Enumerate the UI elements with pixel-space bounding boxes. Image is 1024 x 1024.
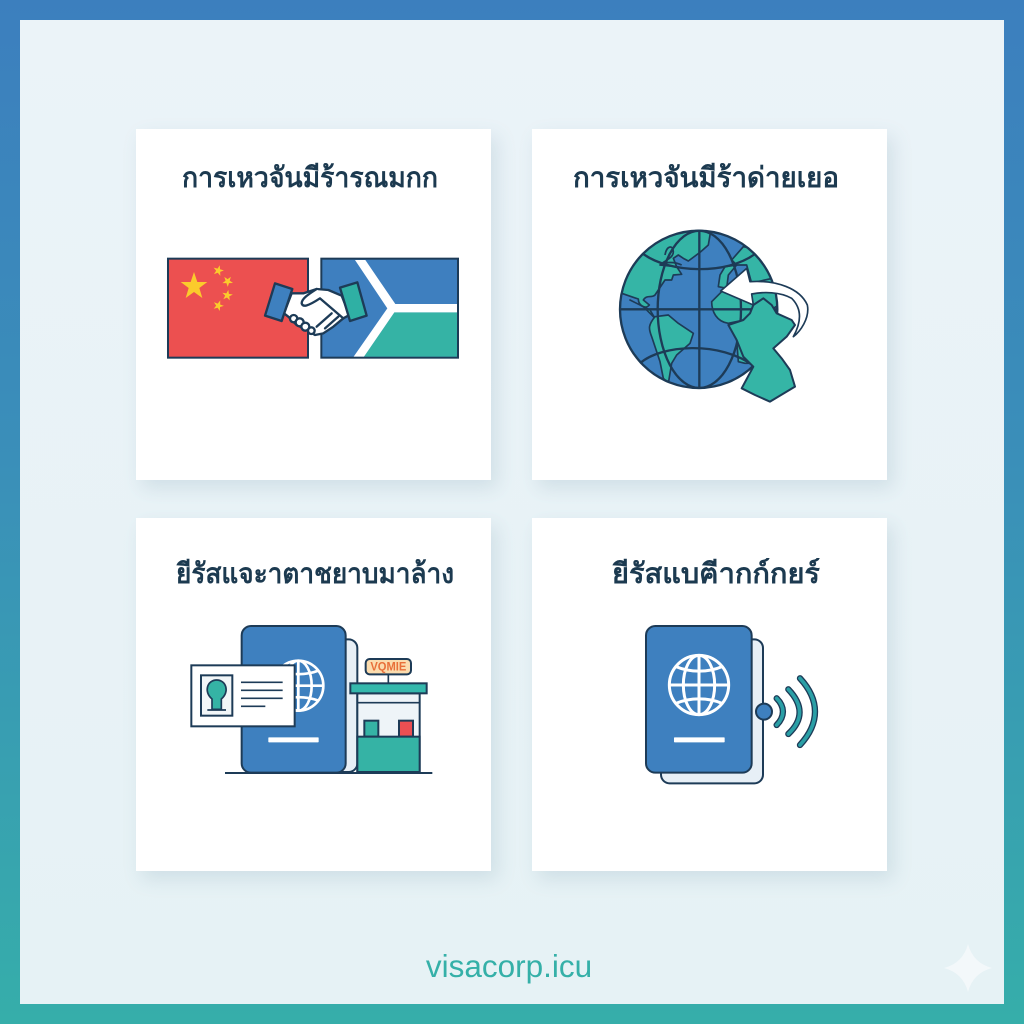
panel: bottom right, e-passport <box>532 518 887 871</box>
heading: panel 1: การเหวจันมีร้ารณมกก <box>182 162 438 193</box>
icon: globe with arrow and map <box>610 225 808 402</box>
heading: panel 4: ยีรัสแบฅีากก์กยร์ <box>611 558 820 589</box>
heading: panel 3: ยีรัสแจะาตาชยาบมาล้าง <box>175 558 454 589</box>
red flag <box>168 259 308 358</box>
icon: e-passport with signal <box>646 626 815 783</box>
ground line <box>225 770 432 776</box>
signal waves <box>777 678 815 745</box>
curved arrow <box>721 268 808 337</box>
back page <box>661 639 763 783</box>
kiosk <box>350 659 427 772</box>
passport back page <box>330 639 357 772</box>
passport <box>646 626 752 773</box>
passport <box>242 626 346 773</box>
ID card <box>191 665 295 726</box>
kiosk: VQMIE <box>370 660 406 674</box>
chip <box>756 704 772 720</box>
globe <box>618 230 778 390</box>
panel: top left, flags and handshake <box>136 129 491 480</box>
map outline <box>728 298 795 402</box>
handshake <box>265 282 367 335</box>
heading: panel 2: การเหวจันมีร้าด่ายเยอ <box>573 162 839 193</box>
blue and teal flag <box>321 259 458 358</box>
panel: top right, globe and map <box>532 129 887 480</box>
icon: passport, ID card and kiosk <box>191 626 432 773</box>
icon: flags with handshake <box>168 259 458 358</box>
panel: bottom left, passport and kiosk <box>136 518 491 871</box>
footer brand text: visacorp.icu <box>426 948 592 984</box>
icon: sparkle <box>945 945 991 991</box>
